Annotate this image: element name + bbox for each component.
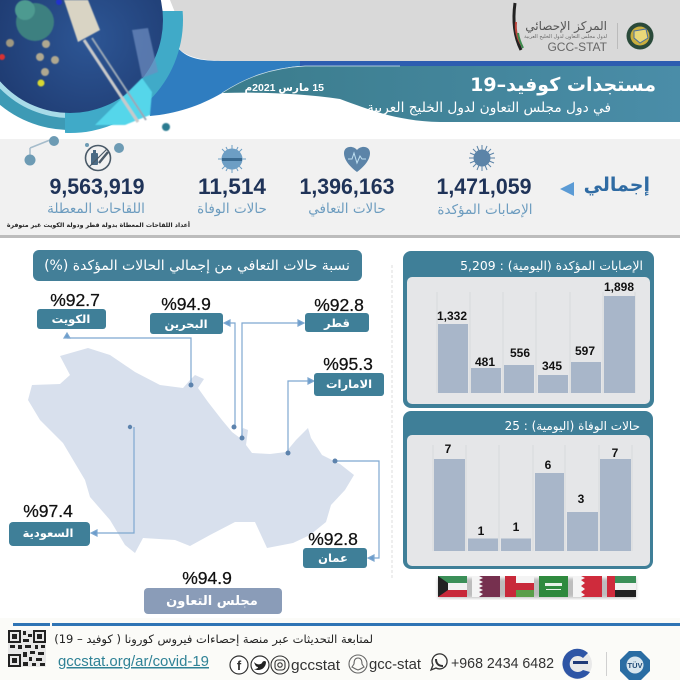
logo: GCC-STAT: GCC-STAT [547, 40, 608, 54]
stat: vaccines: 9,563,919 [50, 174, 144, 199]
map title [33, 250, 362, 281]
stat: vaccines: اللقاحات المعطلة [47, 201, 145, 217]
banner: title [222, 66, 680, 122]
bar values: 3 [578, 492, 585, 506]
label: Bahrain [150, 294, 223, 334]
flag: UAE [607, 576, 636, 597]
label: Bahrain: %94.9 [161, 294, 211, 314]
icon: virus [469, 145, 495, 171]
website link: gccstat.org/ar/covid-19 [58, 653, 209, 670]
logo: TUV [620, 651, 650, 680]
phone number: +968 2434 6482 [451, 655, 554, 672]
label: Kuwait [37, 290, 106, 329]
connector: Oman [332, 458, 379, 561]
logo: GCC-STAT: المركز الإحصائي [525, 19, 607, 34]
bar values: 1,898 [604, 280, 634, 294]
header background [140, 0, 680, 116]
connector: Bahrain [224, 320, 236, 430]
heading: مستجدات كوفيد–19 [470, 74, 656, 96]
panel: totals strip [0, 136, 680, 238]
bar values: 1 [478, 524, 485, 538]
bar values: 6 [545, 458, 552, 472]
label: Bahrain: البحرين [164, 317, 208, 331]
label: Saudi: السعودية [23, 526, 73, 541]
icon: instagram [271, 656, 289, 674]
icon: heart [344, 147, 370, 172]
stat: recoveries: 1,396,163 [300, 174, 394, 199]
connector: Saudi [91, 425, 134, 536]
stat: recoveries: حالات التعافي [308, 201, 386, 217]
subheading: في دول مجلس التعاون لدول الخليج العربية [367, 100, 611, 116]
bar values: 597 [575, 344, 595, 358]
connector: Qatar [240, 320, 304, 440]
bar values: 556 [510, 346, 530, 360]
QR code [8, 630, 46, 667]
stat: deaths: حالات الوفاة [197, 201, 267, 217]
flag: Saudi [539, 576, 568, 597]
icon: facebook: f [237, 658, 242, 673]
footnote: أعداد اللقاحات المعطاة بدولة قطر ودولة الكويت غير متوفرة [7, 221, 190, 229]
panel: daily deaths chart [403, 411, 653, 569]
label: Oman: %92.8 [308, 529, 358, 549]
label: GCC: مجلس التعاون [166, 594, 258, 609]
label: Saudi: %97.4 [23, 501, 73, 521]
label: Saudi [9, 501, 90, 546]
panel heading: حالات الوفاة (اليومية) : 25 [505, 419, 640, 434]
total heading: إجمالي [584, 174, 650, 196]
label: Kuwait: الكويت [52, 312, 90, 327]
bar values [437, 280, 634, 373]
logo: GCC-STAT [514, 3, 618, 54]
stat: confirmed cases: 1,471,059 [436, 174, 532, 199]
logo: TUV: TÜV [628, 661, 642, 670]
bar chart [434, 459, 631, 551]
map title: نسبة حالات التعافي من إجمالي الحالات المؤكدة (%) [44, 258, 350, 274]
panel: daily cases chart [403, 251, 654, 408]
icon: virus light [218, 145, 246, 173]
divider [391, 265, 393, 578]
connector: UAE [286, 378, 314, 456]
stat: vaccines [47, 146, 145, 217]
bar chart [438, 296, 635, 393]
icon: facebook [230, 656, 248, 674]
header image: vaccine and molecules [0, 0, 183, 133]
connector: Kuwait [64, 333, 194, 388]
label: GCC [144, 568, 282, 614]
label: UAE: %95.3 [323, 354, 373, 374]
label: Qatar: قطر [323, 316, 350, 330]
label: Kuwait: %92.7 [50, 290, 100, 310]
label: Qatar: %92.8 [314, 295, 364, 315]
panel: recovery rate map [9, 250, 384, 614]
label: Oman: عمان [318, 551, 348, 565]
logo: GCC-STAT: لدول مجلس التعاون لدول الخليج العربية [524, 34, 607, 40]
flag: Kuwait [438, 576, 467, 597]
stat: deaths [197, 145, 267, 217]
bar values: 7 [445, 442, 452, 456]
flag: Bahrain [573, 576, 602, 597]
stat: deaths: 11,514 [198, 174, 267, 199]
logos [514, 3, 654, 54]
follow text: لمتابعة التحديثات عبر منصة إحصاءات فيروس كورونا ( كوفيد – 19) [54, 632, 373, 647]
label: Oman [303, 529, 367, 568]
bar values: 481 [475, 355, 495, 369]
date: 15 مارس 2021م [244, 82, 324, 94]
label: Qatar [305, 295, 369, 332]
icon: whatsapp [431, 654, 447, 670]
icon: twitter [251, 656, 269, 674]
bar values: 7 [612, 446, 619, 460]
bar values: 345 [542, 359, 562, 373]
logo: GCC emblem [626, 22, 654, 50]
bar values [445, 442, 619, 538]
handle gcc-stat: gcc-stat [369, 656, 422, 673]
label: GCC: %94.9 [182, 568, 232, 588]
icon: vaccine [86, 146, 110, 170]
label: UAE: الامارات [326, 377, 372, 391]
bar values: 1,332 [437, 309, 467, 323]
handle gccstat: gccstat [291, 657, 341, 674]
panel heading: الإصابات المؤكدة (اليومية) : 5,209 [460, 258, 643, 274]
flag: Oman [505, 576, 534, 597]
label: UAE [314, 354, 384, 396]
flags [438, 576, 636, 598]
icon: snapchat [349, 655, 367, 673]
footer [0, 618, 680, 680]
flag: Qatar [472, 576, 500, 597]
bar values: 1 [513, 520, 520, 534]
stat: confirmed cases: الإصابات المؤكدة [437, 202, 533, 218]
map [28, 348, 354, 553]
stat: confirmed cases [436, 145, 533, 218]
icon: arrow [560, 182, 574, 196]
stat: recoveries [300, 147, 394, 217]
logo: certificate [562, 649, 592, 679]
